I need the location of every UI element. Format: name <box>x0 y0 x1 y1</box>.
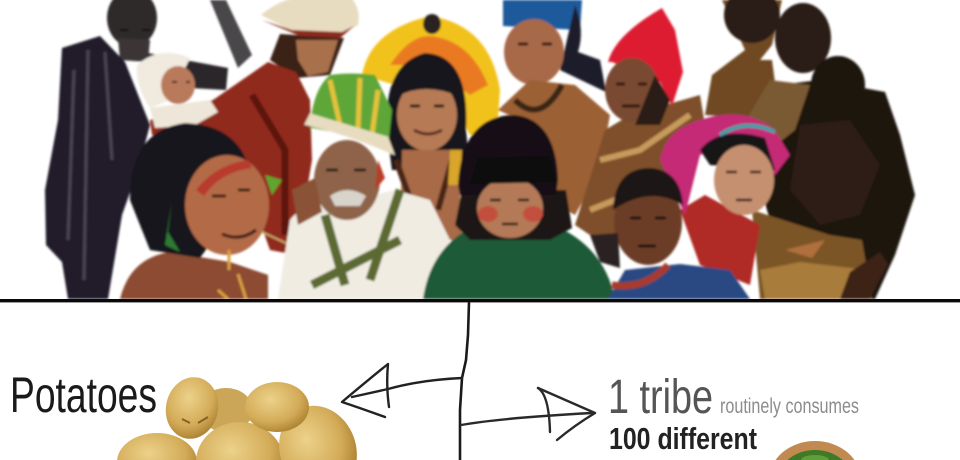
photo collage of indigenous people <box>45 0 915 299</box>
text: 1 tribe routinely consumes: 1 tribe <box>608 371 713 424</box>
vertical hand-drawn divider <box>460 302 469 460</box>
figure: man in dark striped robe <box>45 0 252 299</box>
figure: woman with red headscarf and patterned shawl <box>575 8 705 240</box>
woven bowl of greens <box>776 441 854 460</box>
figure: feather headdress and smiling man <box>362 14 500 240</box>
horizontal divider line <box>0 299 960 302</box>
figure: child in black fur hat and green coat <box>423 115 615 299</box>
text: 100 different foodstuffs: 100 different <box>609 421 757 456</box>
figure: standing women with baby on the right <box>705 0 915 299</box>
left hand-drawn arrow <box>342 364 462 417</box>
figure: man with blue feather headdress <box>498 0 610 215</box>
figure: woman with colourful head wrap <box>660 114 790 285</box>
right hand-drawn arrow <box>461 388 595 440</box>
heading: Potatoes: Potatoes <box>10 367 157 423</box>
text: 1 tribe routinely consumes <box>608 371 859 424</box>
figure: woman in red cloak with baby <box>137 0 359 255</box>
text: 100 different foodstuffs <box>610 427 757 450</box>
figure: young boy in blue shirt <box>590 168 750 299</box>
figure: elder with green feather crown <box>278 74 450 299</box>
text: 1 tribe routinely consumes: routinely consumes <box>720 395 859 418</box>
potato pile image <box>117 372 369 460</box>
figure: woman with green face paint headdress side profile <box>120 123 290 299</box>
